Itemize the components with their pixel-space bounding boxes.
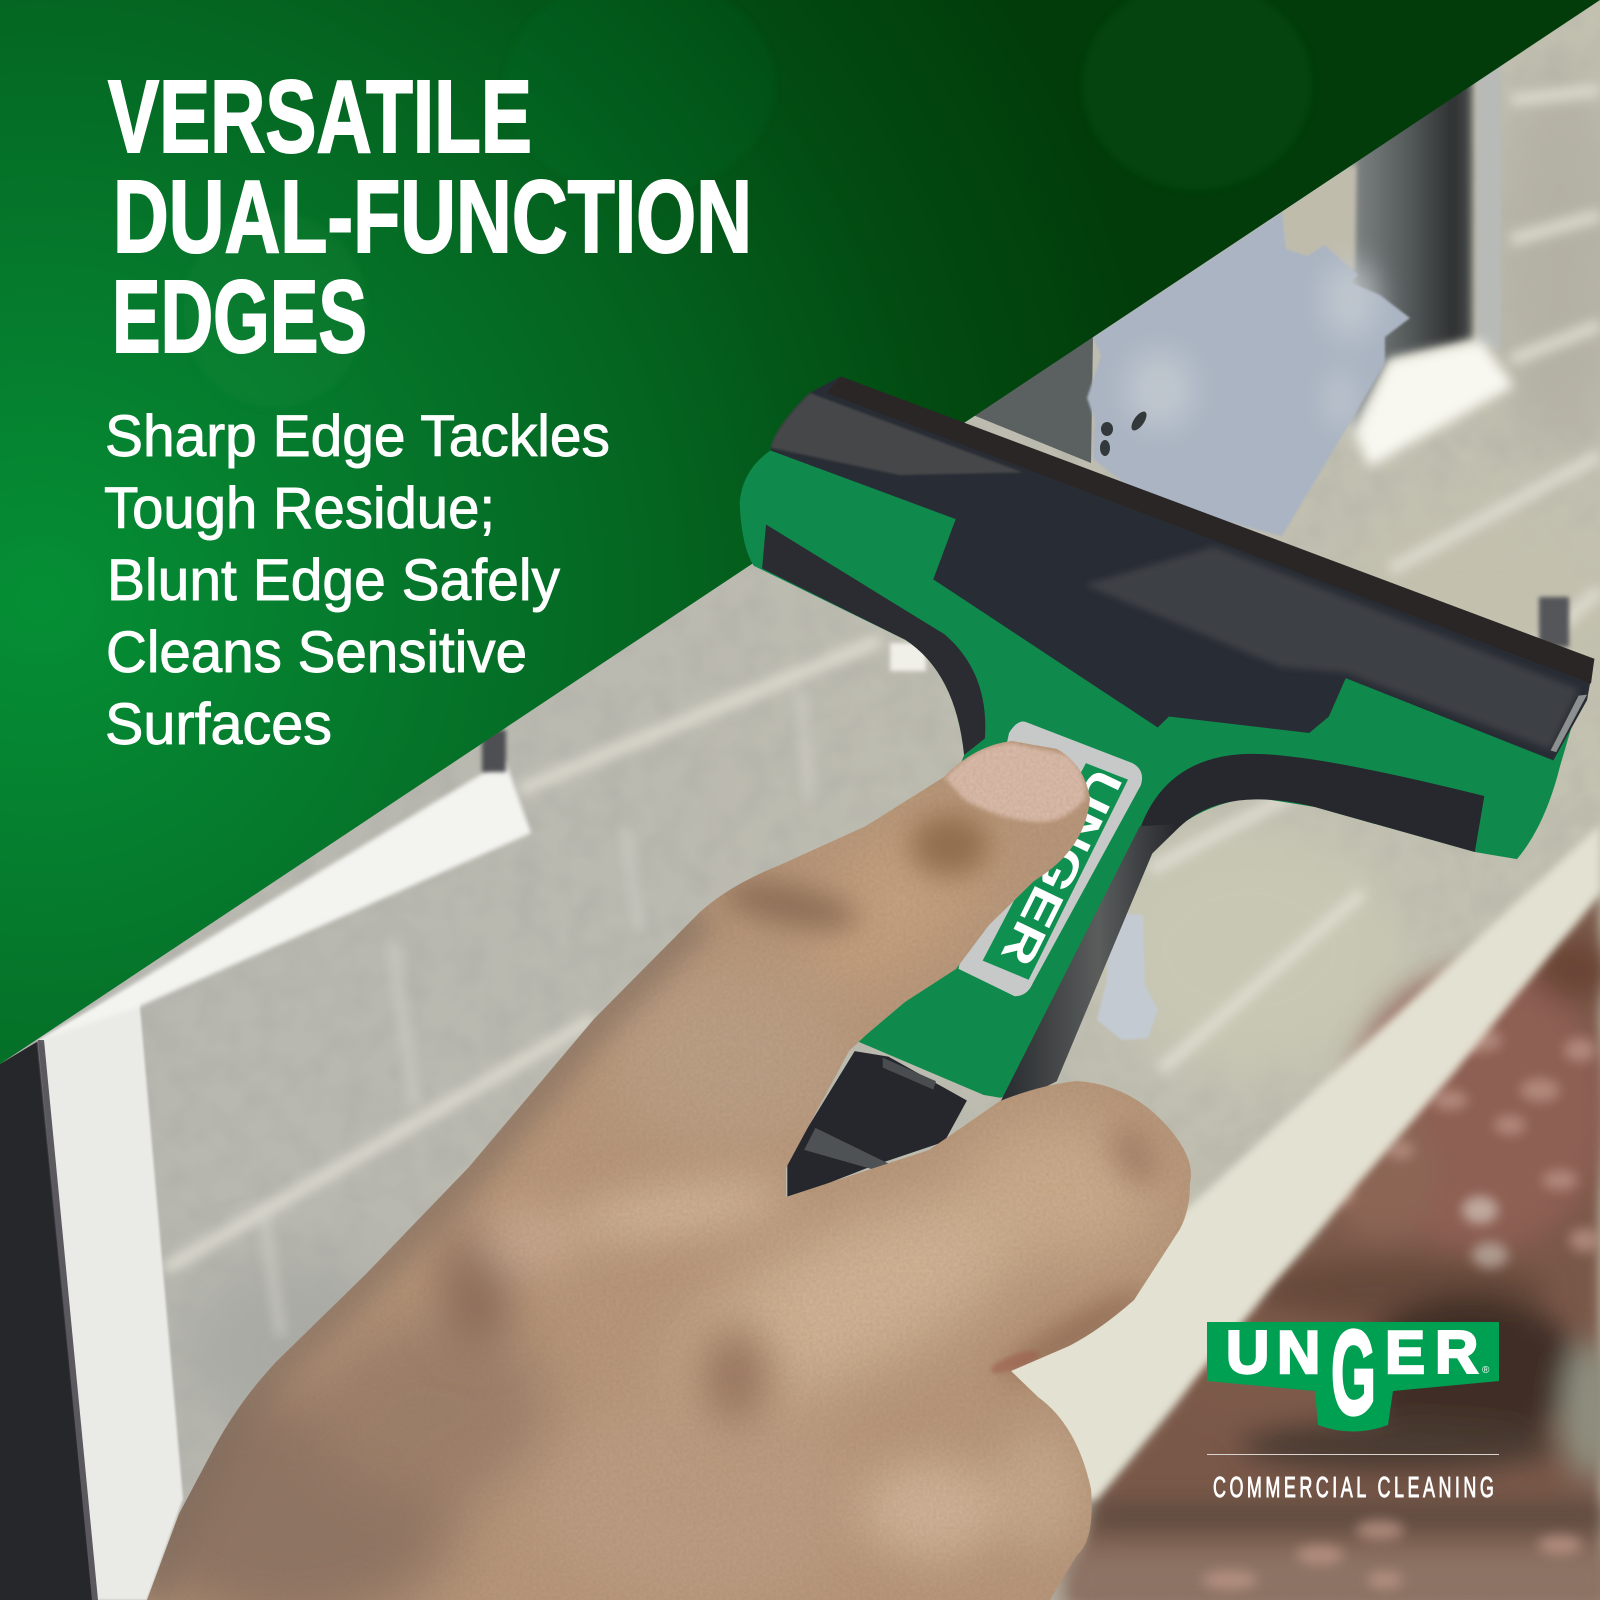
left grip bbox=[762, 525, 985, 755]
skin texture bbox=[512, 744, 1158, 1576]
hand holding the tool bbox=[100, 700, 1200, 1600]
label plate bbox=[959, 722, 1142, 996]
logo wordmark: ER bbox=[1385, 1319, 1478, 1386]
logo badge bbox=[1207, 1322, 1499, 1432]
registered mark: ® bbox=[1482, 1365, 1490, 1376]
lighter grey blade highlights bbox=[771, 393, 1023, 475]
scraped residue tape bbox=[1087, 212, 1410, 536]
mortar lines bbox=[165, 90, 1600, 1269]
subtitle text block bbox=[104, 404, 610, 757]
squeegee scraper tool bbox=[740, 376, 1594, 1199]
upper right window glass bbox=[1354, 60, 1472, 432]
subtitle text block: Sharp Edge Tackles bbox=[105, 404, 610, 469]
subtitle text block: Tough Residue; bbox=[104, 476, 495, 541]
mulch gravel spots bbox=[1202, 1028, 1600, 1590]
logo wordmark: G bbox=[1331, 1306, 1376, 1440]
dark stem side bbox=[995, 823, 1183, 1113]
title: EDGES bbox=[112, 259, 367, 374]
right grip bbox=[1141, 754, 1484, 852]
dark reflection behind tape bbox=[973, 337, 1093, 463]
label green inset bbox=[983, 763, 1128, 980]
window frame shadow edge bbox=[38, 1040, 98, 1600]
blade cartridge bbox=[787, 1051, 967, 1199]
logo tagline: COMMERCIAL CLEANING bbox=[1213, 1472, 1494, 1504]
shaded left edge of hand bbox=[147, 912, 700, 1600]
green handle body bbox=[740, 451, 1573, 1098]
skin shading bbox=[150, 848, 1160, 1600]
window light frame bbox=[1477, 40, 1501, 350]
title bbox=[108, 59, 752, 374]
thumbnail bbox=[945, 743, 1085, 822]
concrete base band bbox=[1000, 825, 1600, 1500]
wall beside the window bbox=[1282, 165, 1356, 270]
window sill right bbox=[1354, 340, 1514, 467]
logo: Unger Commercial Cleaning bbox=[1207, 1306, 1499, 1504]
subtitle text block: Cleans Sensitive bbox=[106, 620, 527, 685]
top blade edge bbox=[827, 376, 1594, 684]
scraped residue droplet bbox=[1097, 912, 1158, 1040]
bokeh highlights bbox=[183, 0, 1312, 408]
subtitle text block: Blunt Edge Safely bbox=[107, 548, 560, 613]
black blade holder bbox=[771, 376, 1594, 760]
blade end highlight bbox=[1551, 695, 1587, 752]
logo wordmark bbox=[1226, 1306, 1478, 1440]
subtitle text block: Surfaces bbox=[105, 692, 332, 757]
white window sill bbox=[40, 760, 531, 1040]
title: VERSATILE bbox=[108, 59, 532, 174]
title: DUAL-FUNCTION bbox=[113, 159, 752, 274]
window frame left bbox=[0, 1040, 94, 1600]
logo divider bbox=[1207, 1454, 1499, 1455]
green diagonal panel bbox=[0, 0, 1600, 1064]
wall shading bbox=[180, 60, 1600, 1440]
mulch bed bbox=[1060, 892, 1600, 1600]
label text: UNGER bbox=[991, 762, 1132, 973]
logo wordmark: UN bbox=[1226, 1319, 1320, 1386]
